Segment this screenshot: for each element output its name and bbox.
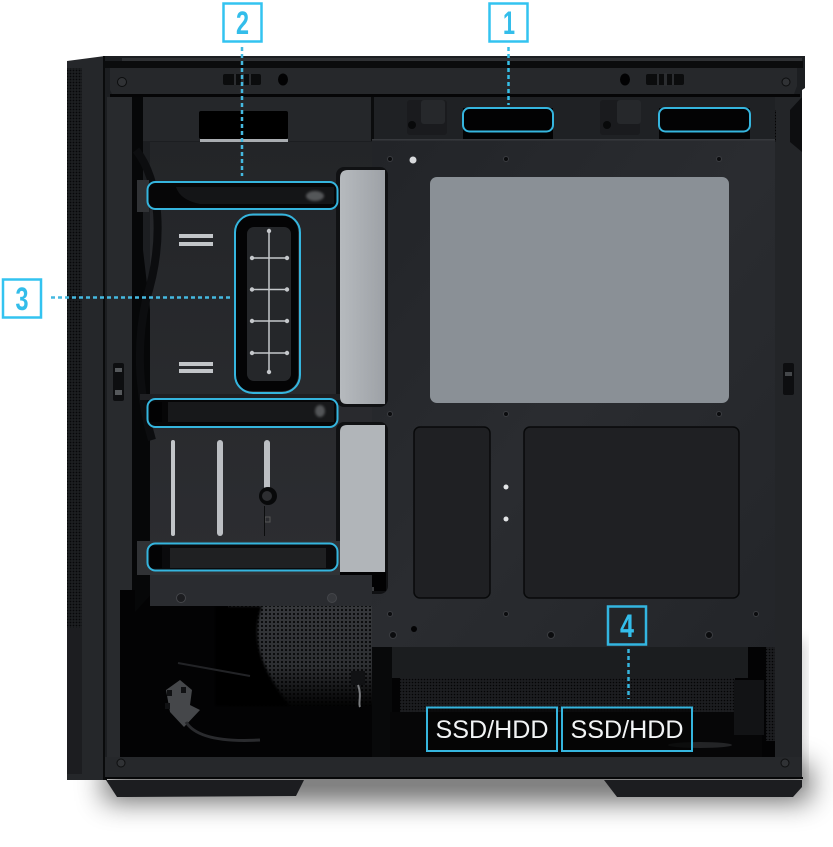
label 2: 2 — [236, 5, 249, 41]
ground shadow — [104, 640, 810, 801]
rib grille — [236, 216, 298, 391]
label 4: 4 — [620, 608, 634, 644]
label 1 — [490, 4, 528, 42]
label 1: 1 — [503, 5, 515, 41]
highlight: drive bay straps — [148, 182, 338, 570]
cable header — [351, 671, 365, 707]
bottom compartment — [120, 590, 775, 757]
right frame — [770, 97, 802, 757]
rear mesh — [215, 606, 373, 706]
leader line 1 — [507, 47, 510, 105]
side latches — [113, 363, 794, 401]
left frame — [107, 97, 133, 757]
label 4 — [608, 606, 646, 644]
power connector — [165, 680, 260, 740]
strap 2 — [148, 400, 338, 426]
PSU shroud — [392, 647, 748, 678]
drive side panels — [336, 167, 388, 594]
strap flanges — [137, 180, 149, 212]
drive cage plate — [132, 141, 388, 612]
leader line 3 — [51, 296, 230, 299]
feet — [106, 780, 802, 797]
recessed panels — [414, 427, 490, 598]
label: SSD/HDD right: SSD/HDD — [570, 716, 684, 744]
leader line 4 — [627, 649, 630, 699]
standoffs — [388, 156, 758, 638]
slits upper — [179, 234, 213, 373]
strap 1 — [148, 183, 338, 208]
label: SSD/HDD left: SSD/HDD — [436, 716, 548, 744]
top-left bay with window — [143, 97, 374, 142]
case body — [67, 56, 805, 780]
top-right bay with mount slots — [374, 97, 775, 139]
label 3: 3 — [16, 281, 28, 317]
label: SSD/HDD right — [562, 708, 692, 751]
bottom tray lip — [150, 575, 372, 606]
motherboard tray — [372, 139, 775, 647]
slits lower — [171, 440, 277, 536]
highlight: top mount slots — [463, 108, 750, 132]
front panel — [67, 56, 107, 780]
highlight: rib grille — [235, 214, 300, 393]
label: SSD/HDD left — [427, 708, 557, 751]
top rail — [110, 68, 800, 97]
strap 3 — [148, 544, 338, 570]
bottom rail — [105, 757, 803, 779]
label 2 — [224, 4, 262, 42]
chassis — [105, 56, 805, 778]
CPU cutout — [430, 177, 729, 403]
leader line 2 — [241, 47, 243, 176]
label 3 — [3, 280, 41, 318]
